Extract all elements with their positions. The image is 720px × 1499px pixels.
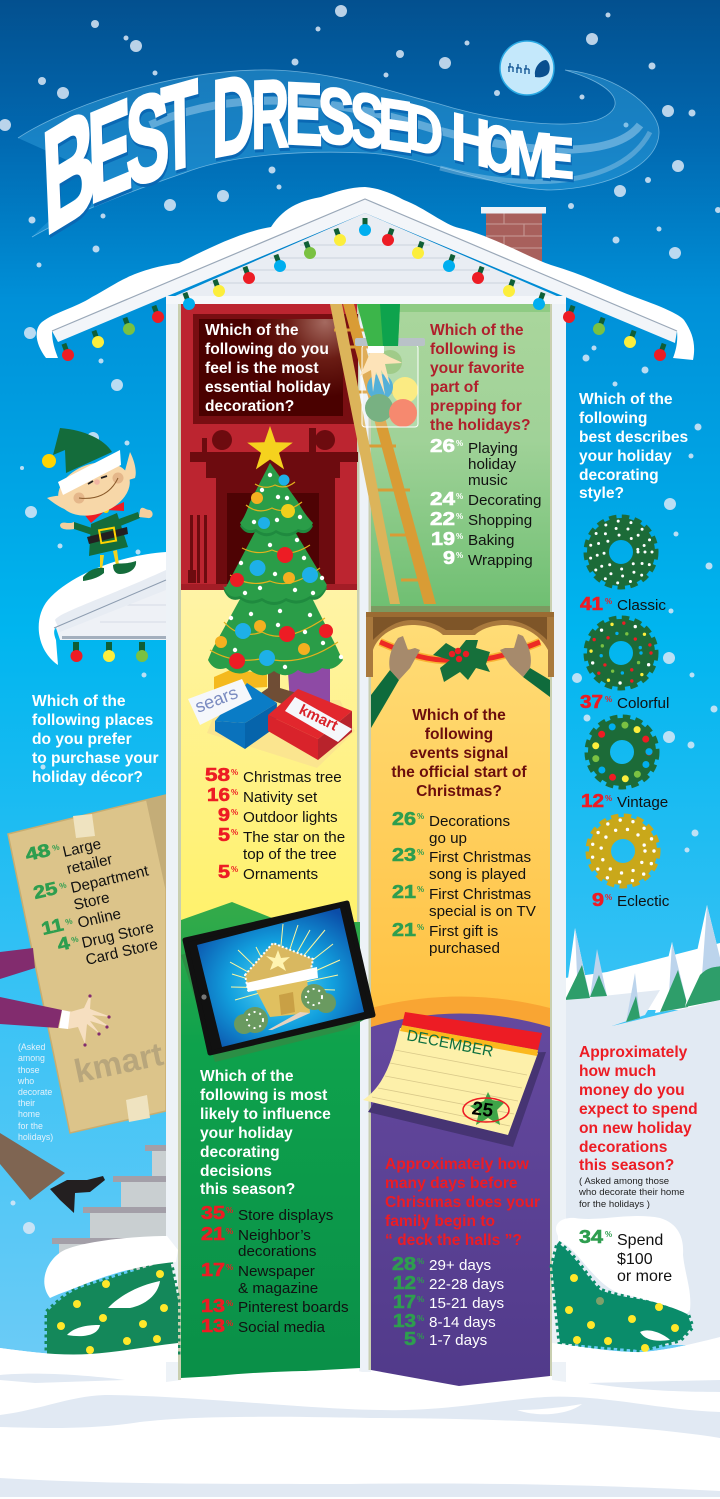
list: days before Christmas: 13	[393, 1311, 416, 1331]
heading: deck the halls: Christmas does your	[385, 1194, 540, 1211]
list: days before Christmas	[392, 1254, 505, 1349]
heading: places to purchase: holiday décor?	[32, 769, 143, 786]
list: official start of Christmas: Decorations	[429, 813, 510, 830]
note: asked among those who decorate: for the holidays )	[579, 1199, 650, 1210]
elf head	[47, 452, 136, 511]
heading: essential decoration: essential holiday	[205, 379, 331, 396]
presents with Sears and Kmart tags	[188, 660, 355, 768]
wreath: colorful	[588, 620, 654, 686]
list: places to purchase décor: %	[70, 935, 79, 945]
label: vintage: 12	[581, 791, 604, 811]
heading: official start of Christmas: following	[425, 726, 493, 743]
stat: spend $100 or more: $100	[617, 1251, 653, 1268]
wreath: eclectic	[590, 818, 656, 884]
note: asked among those who decorate: among	[18, 1053, 45, 1063]
right bush with snow and lights	[552, 1216, 692, 1352]
label: classic: 41	[580, 594, 603, 614]
icon: moon with Santa's sleigh	[500, 41, 554, 95]
tag: kmart	[285, 697, 352, 742]
panel: influence decisions (green)	[181, 902, 360, 1378]
list: influence decisions: %	[226, 1299, 233, 1308]
cardboard kmart box	[8, 795, 166, 1133]
title: BEST DRESSED HOME: E	[378, 83, 412, 169]
title: BEST DRESSED HOME: B	[40, 75, 99, 267]
heading: places to purchase: to purchase your	[32, 750, 159, 767]
heading: money to spend: expect to spend	[579, 1101, 698, 1118]
elf body	[89, 513, 128, 556]
left bush with snow and lights	[44, 1236, 178, 1357]
list: essential decorations: 16	[207, 785, 230, 805]
list: official start of Christmas: go up	[429, 830, 467, 847]
list: influence decisions: %	[226, 1319, 233, 1328]
note: asked among those who decorate: holidays)	[18, 1132, 53, 1142]
snowdrifts over the bushes	[0, 1337, 720, 1400]
heading: favorite part of prepping: following is	[430, 341, 516, 358]
heading: influence decisions: this season?	[200, 1181, 295, 1198]
Christmas tree with ornaments	[208, 426, 343, 675]
list: official start of Christmas: purchased	[429, 940, 500, 957]
list: favorite part of prepping: Wrapping	[468, 552, 533, 569]
list: official start of Christmas: special is on TV	[429, 903, 537, 920]
list: essential decorations: top of the tree	[243, 846, 337, 863]
list: official start of Christmas: 21	[392, 882, 416, 902]
list: essential decorations: 5	[218, 862, 230, 882]
panel: deck the halls (purple)	[371, 1014, 550, 1386]
elf hat	[53, 428, 112, 473]
list: influence decisions: 21	[201, 1224, 225, 1244]
roof with snow and siding	[37, 187, 694, 360]
title: BEST DRESSED HOME: D	[212, 50, 255, 181]
list: official start of Christmas: First Christmas	[429, 849, 531, 866]
list: official start of Christmas: %	[417, 923, 424, 932]
list: official start of Christmas: First Christmas	[429, 886, 531, 903]
right scenery: snowy hills and pine trees	[565, 905, 720, 1345]
list: official start of Christmas: 26	[392, 809, 416, 829]
leg with black high heel	[0, 1133, 105, 1213]
label: colorful: 37	[580, 692, 603, 712]
heading: essential decoration: Which of the	[205, 322, 299, 339]
heading: decorating style: style?	[579, 485, 624, 502]
list: places to purchase décor: retailer	[65, 851, 114, 878]
note: asked among those who decorate: who decorate their home	[578, 1187, 685, 1198]
list: essential decorations: %	[231, 768, 238, 777]
snowy ground	[0, 1337, 720, 1499]
list: influence decisions: Store displays	[238, 1207, 334, 1224]
list: favorite part of prepping: Decorating	[468, 492, 541, 509]
list: days before Christmas: 17	[393, 1292, 416, 1312]
heading: influence decisions: your holiday	[200, 1125, 293, 1142]
tree trunk and base	[258, 660, 300, 705]
heading: influence decisions: decisions	[200, 1163, 272, 1180]
heading: favorite part of prepping: prepping for	[430, 398, 522, 415]
title: BEST DRESSED HOME: H	[451, 99, 491, 183]
heading: influence decisions: following is most	[200, 1087, 327, 1104]
list: essential decorations: 9	[218, 805, 230, 825]
label: colorful: Colorful	[617, 695, 669, 712]
heading: influence decisions: Which of the	[200, 1068, 294, 1085]
list: official start of Christmas: First gift is	[429, 923, 499, 940]
panel: official start of Christmas (orange)	[371, 613, 550, 1040]
list: days before Christmas: 22-28 days	[429, 1276, 505, 1293]
left staircase	[52, 1145, 168, 1270]
list: places to purchase décor: Drug Store	[80, 919, 155, 952]
list: essential decorations: 5	[218, 825, 230, 845]
list: favorite part of prepping: 22	[430, 509, 455, 529]
list: influence decisions: %	[226, 1206, 233, 1215]
list: places to purchase décor: Department	[69, 862, 151, 897]
side porch roof with snow and lights	[39, 552, 166, 665]
heading: deck the halls: family begin to	[385, 1213, 495, 1230]
elf bow	[84, 502, 124, 523]
list: official start of Christmas: 23	[392, 845, 416, 865]
list: official start of Christmas: 21	[392, 920, 416, 940]
list: favorite part of prepping: Shopping	[468, 512, 532, 529]
heading: favorite part of prepping: part of	[430, 379, 479, 396]
list: favorite part of prepping: %	[456, 512, 463, 521]
list: influence decisions: 17	[201, 1260, 225, 1280]
title: BEST DRESSED HOME: O	[482, 109, 516, 189]
heading: decorating style: Which of the	[579, 391, 673, 408]
list: days before Christmas: %	[417, 1276, 424, 1285]
stat: spend $100 or more: 34	[579, 1227, 603, 1247]
list: places to purchase décor: %	[58, 881, 67, 891]
note: asked among those who decorate: those	[18, 1065, 40, 1075]
label: eclectic	[592, 890, 670, 910]
holly	[433, 640, 490, 682]
heading: deck the halls: “ deck the halls ”?	[385, 1232, 522, 1249]
arms and hand holding the box	[0, 948, 111, 1047]
heading: official start of Christmas: events signal	[410, 745, 508, 762]
list: essential decorations: The star on the	[243, 829, 345, 846]
December calendar marked 25: 25	[471, 1098, 495, 1122]
list: favorite part of prepping: 26	[430, 436, 455, 456]
fireplace silhouette	[190, 452, 358, 584]
heading: essential decoration: feel is the most	[205, 360, 319, 377]
heading: deck the halls: Approximately how	[385, 1156, 530, 1173]
label: colorful: %	[605, 695, 612, 704]
stat: spend $100 or more: Spend	[617, 1232, 663, 1249]
list: places to purchase décor: Online	[76, 905, 123, 932]
wreath: vintage	[589, 719, 655, 785]
list: days before Christmas: 15-21 days	[429, 1295, 505, 1312]
list: essential decorations: Outdoor lights	[243, 809, 338, 826]
right hand	[523, 668, 550, 697]
list: favorite part of prepping: Baking	[468, 532, 514, 549]
list: influence decisions: Neighbor’s	[238, 1227, 311, 1244]
list: places to purchase décor: %	[51, 843, 60, 853]
note: asked among those who decorate: their	[18, 1098, 35, 1108]
tree star	[247, 426, 293, 469]
heading: decorating style: best describes	[579, 429, 689, 446]
list: places to purchase décor: Store	[72, 889, 111, 914]
heading: decorating style: your holiday	[579, 448, 672, 465]
list: essential decorations: Ornaments	[243, 866, 319, 883]
list: influence decisions: decorations	[238, 1243, 317, 1260]
heading: essential decoration: decoration?	[205, 398, 294, 415]
note: asked among those who decorate: decorate	[18, 1087, 52, 1097]
panel: favorite part of prepping (green)	[371, 304, 550, 607]
shaded bands in the snow	[0, 1374, 720, 1497]
label: classic: %	[605, 597, 612, 606]
list: essential decorations: 58	[205, 765, 230, 785]
list: places to purchase décor: Large	[61, 836, 103, 861]
present shadow	[207, 700, 355, 768]
list: days before Christmas: %	[417, 1295, 424, 1304]
list: official start of Christmas	[392, 809, 537, 957]
heading: decorating style: following	[579, 410, 647, 427]
wind swoosh behind title	[18, 70, 659, 237]
box logo: kmart: kmart	[71, 1035, 166, 1090]
list: days before Christmas: 5	[404, 1329, 416, 1349]
jar of ornaments with elf hand	[355, 304, 425, 427]
heading: deck the halls: many days before	[385, 1175, 518, 1192]
list: days before Christmas: 1-7 days	[429, 1332, 488, 1349]
list: influence decisions: 13	[201, 1316, 225, 1336]
tag: sears: sears	[192, 682, 241, 717]
list: favorite part of prepping	[430, 436, 541, 569]
list: official start of Christmas: %	[417, 812, 424, 821]
heading: money to spend: Approximately	[579, 1044, 688, 1061]
title: BEST DRESSED HOME: E	[546, 123, 574, 191]
list: favorite part of prepping: 9	[443, 548, 455, 568]
stat: spend $100 or more	[579, 1227, 672, 1285]
label: eclectic: Eclectic	[617, 893, 670, 910]
list: favorite part of prepping: %	[456, 492, 463, 501]
list: influence decisions: Social media	[238, 1319, 326, 1336]
title: BEST DRESSED HOME: D	[405, 89, 443, 171]
heading: favorite part of prepping: your favorite	[430, 360, 525, 377]
heading: favorite part of prepping: the holidays?	[430, 417, 531, 434]
snow covering base of the panels	[166, 1371, 566, 1499]
heading: places to purchase: do you prefer	[32, 731, 132, 748]
elf shoes	[83, 568, 104, 581]
label: colorful	[580, 692, 669, 712]
list: essential decorations: %	[231, 808, 238, 817]
list: favorite part of prepping: Playing	[468, 440, 518, 457]
label: vintage: %	[605, 794, 612, 803]
list: essential decorations: Christmas tree	[243, 769, 342, 786]
note: asked among those who decorate: ( Asked among those	[579, 1176, 669, 1187]
title: BEST DRESSED HOME: R	[251, 58, 289, 170]
tag: sears	[188, 679, 252, 725]
heading: places to purchase: Which of the	[32, 693, 126, 710]
list: days before Christmas: %	[417, 1314, 424, 1323]
list: essential decorations: %	[231, 865, 238, 874]
note: asked among those who decorate: for the	[18, 1121, 43, 1131]
list: influence decisions: Pinterest boards	[238, 1299, 349, 1316]
list: influence decisions: %	[226, 1263, 233, 1272]
ladder	[330, 304, 436, 604]
tag: kmart: kmart	[296, 701, 340, 735]
list: days before Christmas: 29+ days	[429, 1257, 491, 1274]
left hand	[371, 670, 399, 728]
note: asked among those who decorate: who	[17, 1076, 34, 1086]
list: favorite part of prepping: 19	[431, 529, 455, 549]
note: asked among those who decorate: home	[18, 1109, 40, 1119]
list: places to purchase décor: Card Store	[84, 936, 159, 969]
list: essential decorations: Nativity set	[243, 789, 318, 806]
list: favorite part of prepping: %	[456, 551, 463, 560]
title: BEST DRESSED HOME: S	[125, 65, 171, 213]
list: essential decorations: %	[231, 788, 238, 797]
list: official start of Christmas: song is played	[429, 866, 526, 883]
heading: official start of Christmas: Christmas?	[416, 783, 502, 800]
label: eclectic: %	[605, 893, 612, 902]
list: influence decisions: 13	[201, 1296, 225, 1316]
title: BEST DRESSED HOME	[40, 50, 574, 267]
list: places to purchase décor: 25	[31, 878, 59, 903]
list: influence decisions: %	[226, 1227, 233, 1236]
string of roof lights	[58, 218, 670, 363]
heading: favorite part of prepping: Which of the	[430, 322, 524, 339]
heading: official start of Christmas: the official start of	[391, 764, 527, 781]
heading: influence decisions: likely to influence	[200, 1106, 331, 1123]
title: BEST DRESSED HOME: T	[160, 54, 200, 199]
list: days before Christmas: 8-14 days	[429, 1314, 496, 1331]
December calendar marked 25	[363, 1012, 546, 1147]
list: places to purchase décor: 4	[55, 933, 72, 955]
heading: places to purchase: following places	[32, 712, 154, 729]
title: BEST DRESSED HOME: E	[285, 64, 323, 164]
label: vintage: Vintage	[617, 794, 668, 811]
list: places to purchase décor: 11	[39, 914, 65, 939]
list: places to purchase décor	[23, 836, 159, 969]
heading: money to spend: decorations	[579, 1139, 668, 1156]
house columns	[166, 300, 566, 1382]
list: official start of Christmas: %	[417, 848, 424, 857]
list: favorite part of prepping: %	[456, 439, 463, 448]
list: favorite part of prepping: holiday	[468, 456, 517, 473]
title: BEST DRESSED HOME: S	[350, 75, 384, 166]
note: asked among those who decorate: (Asked	[18, 1042, 45, 1052]
heading: money to spend: on new holiday	[579, 1120, 692, 1137]
chimney	[481, 207, 546, 263]
heading: decorating style: decorating	[579, 467, 659, 484]
heading: money to spend: money do you	[579, 1082, 685, 1099]
December calendar marked 25: DECEMBER	[405, 1027, 495, 1061]
list: days before Christmas: 28	[392, 1254, 416, 1274]
title: BEST DRESSED HOME: E	[86, 70, 134, 231]
label: vintage	[581, 791, 668, 811]
heading: money to spend: this season?	[579, 1157, 674, 1174]
panel: essential decoration (red room, yellow floor)	[181, 304, 358, 930]
list: days before Christmas: 12	[393, 1273, 416, 1293]
list: essential decorations: %	[231, 828, 238, 837]
mantel with ribbon, holly and hands	[366, 606, 554, 728]
title: BEST DRESSED HOME: S	[318, 71, 355, 163]
heading: money to spend: how much	[579, 1063, 656, 1080]
heading: official start of Christmas: Which of the	[412, 707, 506, 724]
stat: spend $100 or more: %	[605, 1230, 612, 1239]
label: eclectic: 9	[592, 890, 604, 910]
list: influence decisions: & magazine	[238, 1280, 318, 1297]
question box interior	[199, 319, 343, 416]
list: influence decisions	[201, 1203, 349, 1336]
list: places to purchase décor: 48	[23, 840, 52, 865]
elf on the porch roof	[42, 428, 153, 581]
list: days before Christmas: %	[417, 1257, 424, 1266]
fireplace opening	[227, 493, 319, 584]
list: days before Christmas: %	[417, 1332, 424, 1341]
list: official start of Christmas: %	[417, 885, 424, 894]
label: classic	[580, 594, 666, 614]
tablet showing gold house	[181, 903, 373, 1062]
list: influence decisions: Newspaper	[238, 1263, 315, 1280]
heading: essential decoration: following do you	[205, 341, 329, 358]
title: BEST DRESSED HOME: M	[508, 118, 553, 192]
list: essential decorations	[205, 765, 345, 883]
list: favorite part of prepping: 24	[430, 489, 455, 509]
heading: influence decisions: decorating	[200, 1144, 280, 1161]
stat: spend $100 or more: or more	[617, 1268, 672, 1285]
label: classic: Classic	[617, 597, 666, 614]
list: favorite part of prepping: %	[456, 532, 463, 541]
list: places to purchase décor: %	[64, 917, 73, 927]
list: favorite part of prepping: music	[468, 472, 508, 489]
list: influence decisions: 35	[201, 1203, 225, 1223]
elf legs	[100, 550, 119, 570]
wreath: classic	[588, 519, 654, 585]
question box	[193, 314, 358, 424]
